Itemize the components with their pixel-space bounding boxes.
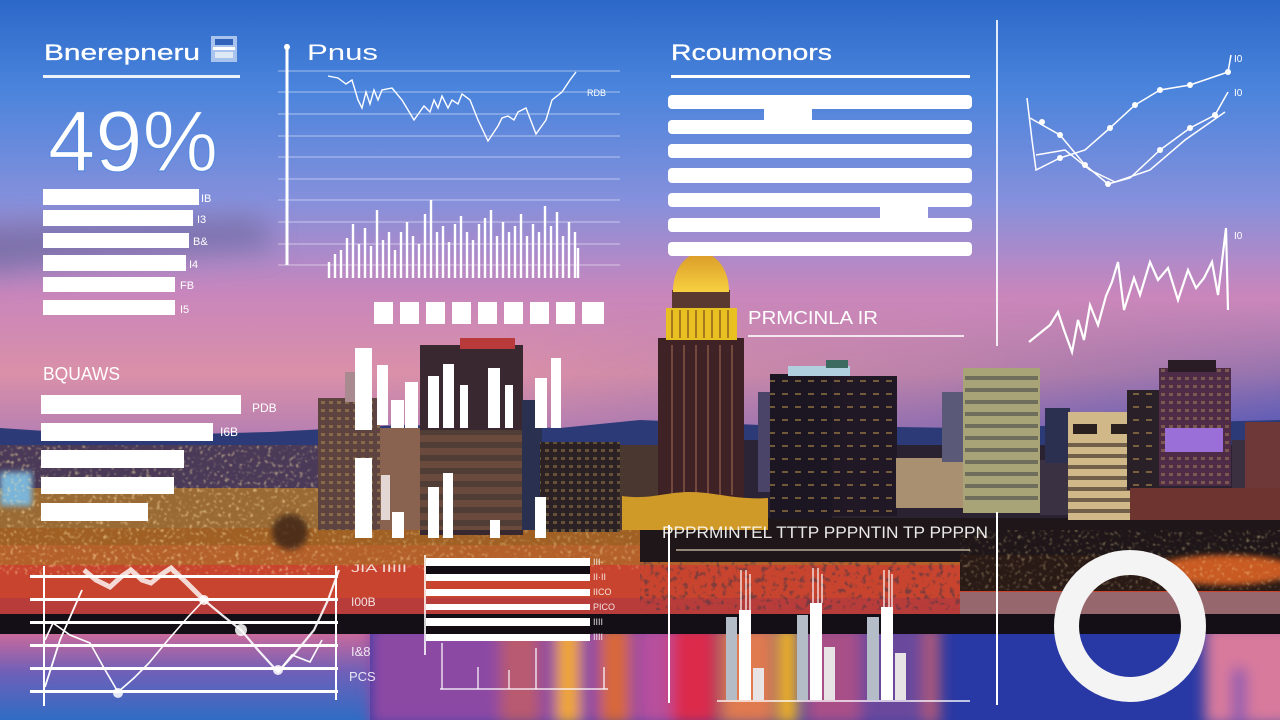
donut chart: [1066, 562, 1194, 690]
heading: entrepreneur: Bnerepneru: [44, 40, 200, 65]
axes: [668, 512, 998, 705]
small labels: II·II: [593, 572, 606, 582]
panel: bottom left line chart: I00B: [351, 595, 376, 609]
volume spikes: [329, 200, 578, 278]
horizontal bar list: I4: [189, 259, 198, 271]
panel: recommendations: [668, 40, 972, 256]
panel: bottom bar chart: [668, 512, 998, 705]
left cluster: [318, 398, 380, 530]
wavy lines: [45, 568, 339, 692]
two-line chart with dots: [1027, 55, 1231, 187]
row of small squares: [374, 302, 604, 324]
panel: bottom left line chart: I&8: [351, 644, 371, 659]
grid lines: [30, 566, 338, 706]
label: tower caption: PRMCINLA IR: [748, 308, 878, 328]
background: dusk sky: [0, 0, 1280, 445]
panel: bottom left line chart: PCS: [349, 669, 376, 684]
small labels: IICO: [593, 587, 612, 597]
vertical divider: [996, 20, 998, 346]
small labels: IIII: [593, 617, 603, 627]
horizontal bars: PDB: [252, 401, 277, 415]
panel: scatter line chart: I0: [1234, 88, 1243, 99]
dots: [113, 595, 283, 698]
right labels: JIA IIIII: [351, 563, 407, 575]
line label: RDB: [587, 88, 606, 98]
horizontal bar list: I3: [197, 214, 206, 226]
right cluster: [896, 458, 964, 508]
small labels: IIII: [593, 632, 603, 642]
skyline buildings: [318, 252, 1280, 535]
small labels: [593, 557, 615, 642]
panel: bottom middle striped bars: [424, 555, 615, 689]
horizontal bar list: B&: [193, 236, 208, 248]
small labels: PICO: [593, 602, 615, 612]
horizontal bar list: [43, 189, 211, 316]
heading: bquaws: BQUAWS: [43, 364, 120, 384]
panel: scatter line chart: [1027, 54, 1243, 187]
big percentage: 49%: [48, 94, 218, 190]
heading rule: [43, 75, 240, 78]
background: city light speckle: [0, 445, 1280, 610]
panel: bquaws bars: [41, 364, 277, 521]
chart label: I0: [1234, 231, 1243, 242]
chart labels: I0: [1234, 54, 1243, 65]
background: dark cloud band: [0, 218, 275, 276]
icon: dark tree: [272, 514, 308, 550]
panel: white towers overlay: [355, 348, 561, 538]
horizontal bar list: FB: [180, 280, 194, 292]
thin rule below caption: [676, 549, 970, 551]
central tower: [658, 338, 744, 500]
background: river with reflections: [0, 625, 1280, 720]
background: city ground bands: [0, 445, 1280, 636]
rounded bar list: [668, 95, 972, 256]
thin baseline chart: [440, 643, 608, 689]
heading: recommendations: Rcoumonors: [671, 40, 832, 65]
backing stripes: [426, 566, 590, 634]
panel: jagged line chart: [1029, 228, 1243, 352]
panel: bottom left line chart: [30, 563, 407, 706]
chart axis and grid: [278, 44, 620, 265]
caption strip: skyline row: PPPRMINTEL TTTP PPPNTIN TP PPPPN: [662, 523, 988, 542]
heading: prices: Pnus: [307, 40, 378, 65]
horizontal bar list: I5: [180, 304, 189, 316]
horizontal bars: [41, 395, 277, 521]
horizontal bar list: IB: [201, 193, 211, 205]
line chart: [328, 72, 576, 141]
dark twin block: [744, 440, 774, 500]
background: distant hills: [0, 420, 1280, 470]
horizontal bars: I6B: [220, 425, 238, 439]
small labels: III·: [593, 557, 604, 567]
heading rule: [671, 75, 970, 78]
panel: prices chart: [278, 40, 620, 324]
icon: small calendar: [211, 36, 237, 62]
grouped bars: [726, 568, 906, 700]
panel: entrepreneur: [43, 36, 240, 316]
axis dot: [284, 44, 290, 50]
